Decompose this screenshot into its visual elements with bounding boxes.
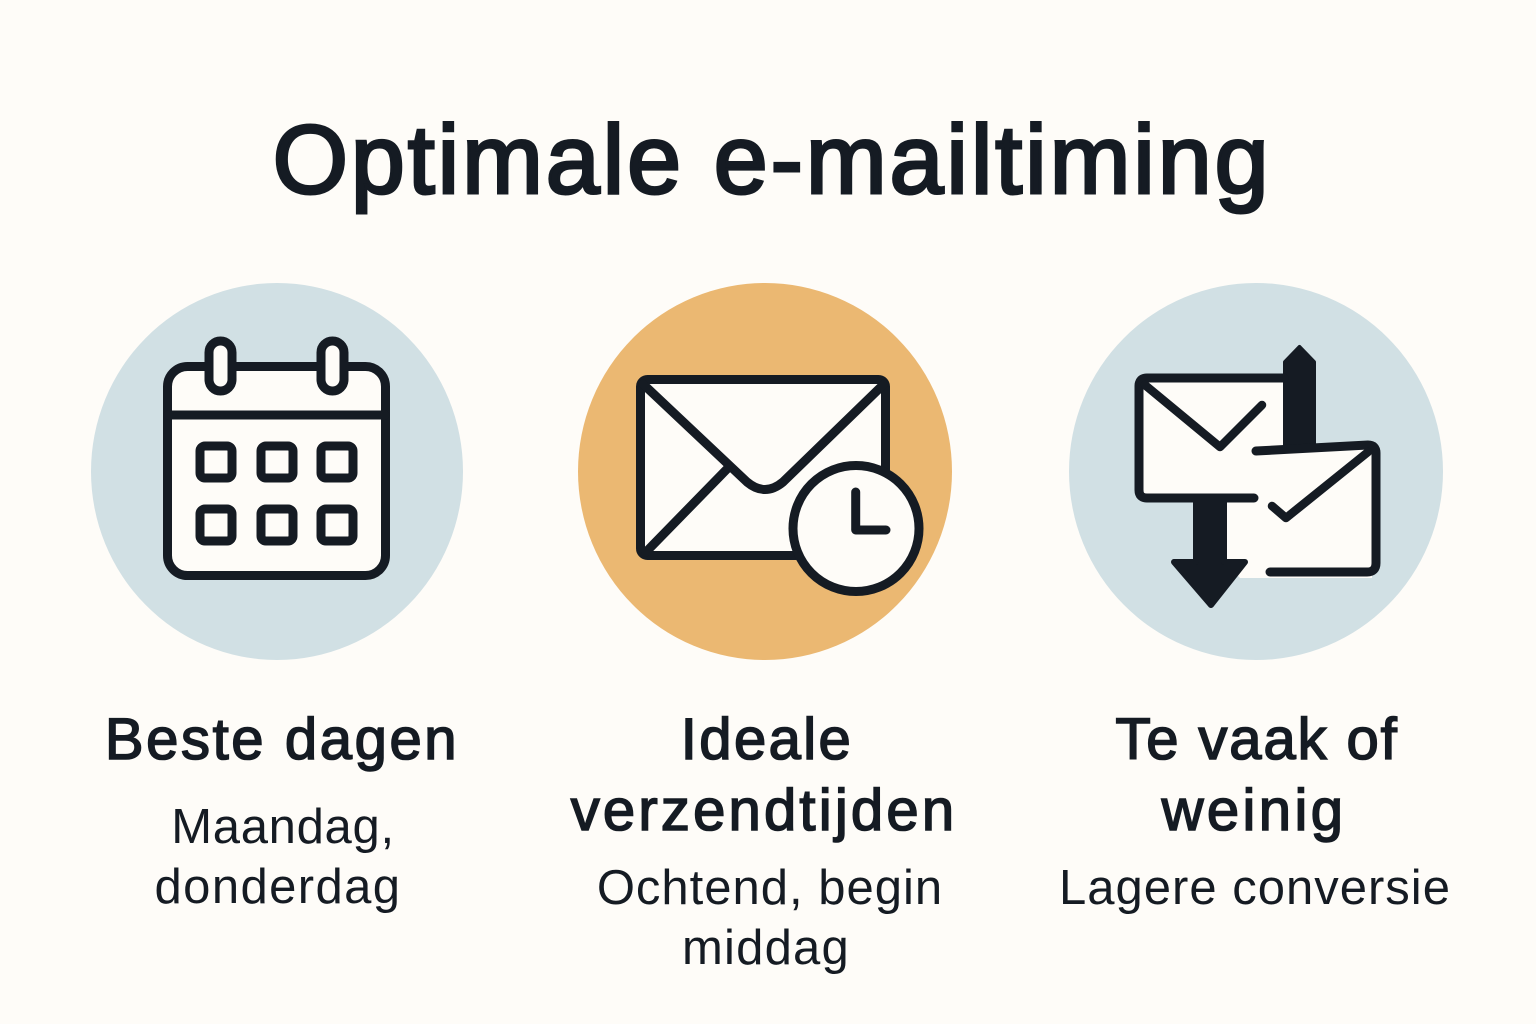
column 2 text: [597, 861, 943, 975]
column 2 heading: [570, 707, 957, 843]
column 3 text: Lagere conversie: [1059, 861, 1451, 915]
column 1 heading: Beste dagen: [105, 707, 459, 772]
column 3 heading: weinig: [1162, 778, 1346, 843]
column 1 text: [155, 800, 401, 914]
column 2 heading: verzendtijden: [571, 778, 957, 843]
column 3 heading: [1115, 707, 1399, 843]
column 1 text: donderdag: [155, 860, 401, 914]
column 3 heading: Te vaak of: [1115, 707, 1399, 772]
column 1 text: Maandag,: [171, 800, 395, 854]
icon: envelope with clock: [578, 283, 952, 660]
title: Optimale e-mailtiming: [273, 105, 1271, 214]
column 2 text: Ochtend, begin: [597, 861, 943, 915]
icon: calendar: [91, 283, 463, 660]
column 2 text: middag: [682, 921, 850, 975]
column 2 heading: Ideale: [681, 707, 853, 772]
icon: envelopes with up and down arrows: [1069, 283, 1443, 660]
